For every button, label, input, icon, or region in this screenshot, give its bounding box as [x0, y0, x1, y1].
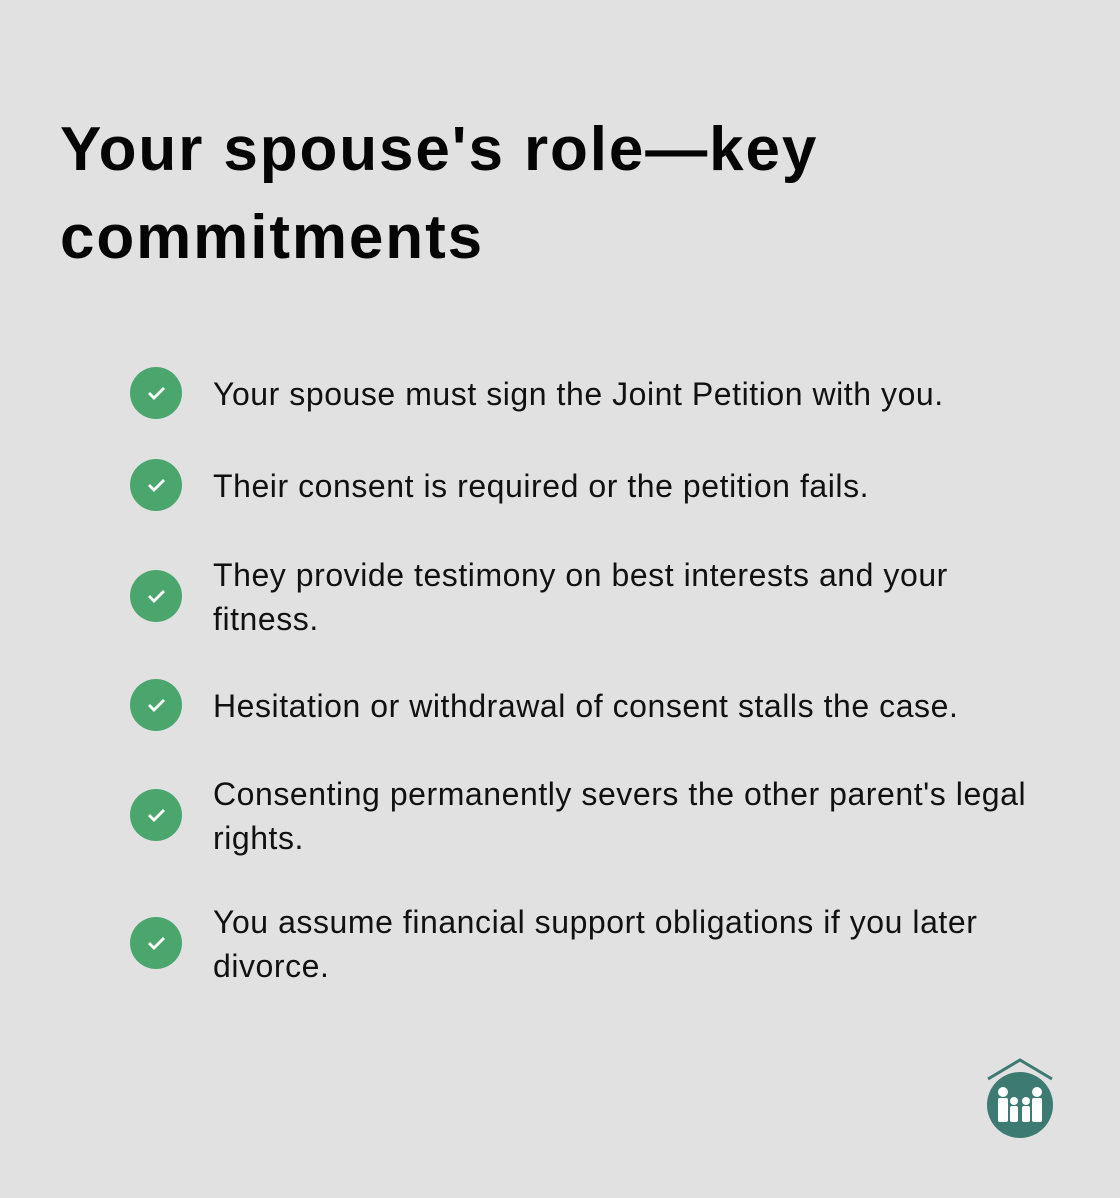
text 2: Their consent is required or the petition fails. — [213, 468, 869, 504]
text 3: fitness. — [213, 601, 319, 637]
item 3 — [130, 557, 948, 637]
item 5 — [130, 776, 1026, 856]
text 1: Your spouse must sign the Joint Petition with you. — [213, 376, 944, 412]
text 5: Consenting permanently severs the other parent's legal — [213, 776, 1026, 812]
text 3 — [213, 557, 948, 637]
title: commitments — [60, 203, 484, 272]
icon: check — [130, 570, 182, 622]
logo — [987, 1058, 1053, 1138]
item 1 — [130, 367, 944, 419]
text 5 — [213, 776, 1026, 856]
icon: check — [130, 789, 182, 841]
icon: check — [130, 917, 182, 969]
title — [60, 115, 818, 272]
title: Your spouse's role—key — [60, 115, 818, 184]
text 6 — [213, 904, 977, 984]
icon: check — [130, 367, 182, 419]
item 4 — [130, 679, 958, 731]
item 2 — [130, 459, 869, 511]
text 5: rights. — [213, 820, 304, 856]
text 4: Hesitation or withdrawal of consent stalls the case. — [213, 688, 958, 724]
icon: check — [130, 459, 182, 511]
text 6: You assume financial support obligations if you later — [213, 904, 977, 940]
item 6 — [130, 904, 977, 984]
text 3: They provide testimony on best interests and your — [213, 557, 948, 593]
icon: check — [130, 679, 182, 731]
text 6: divorce. — [213, 948, 329, 984]
